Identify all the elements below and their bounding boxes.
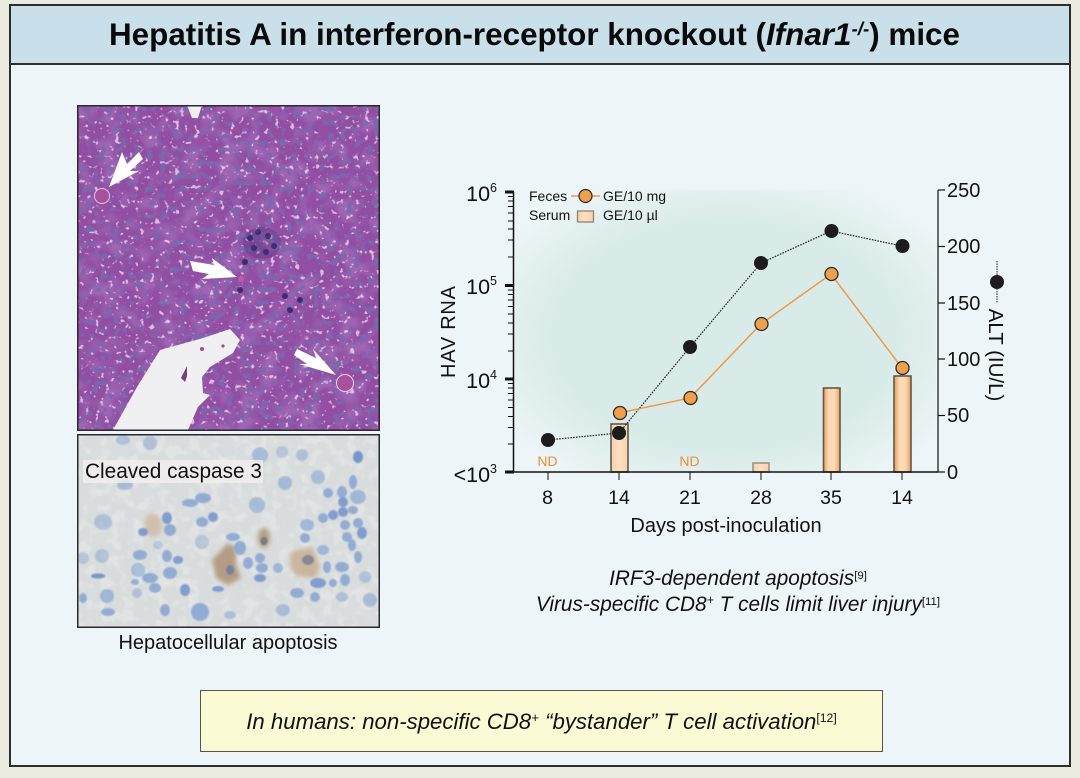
icon: white arrow, centre xyxy=(190,258,237,279)
right axis: ALT: ALT (IU/L) xyxy=(984,309,1007,401)
ALT line series xyxy=(541,224,910,447)
apoptotic cells xyxy=(94,188,354,392)
x axis: days xyxy=(505,472,938,537)
left axis: HAV RNA: 10 xyxy=(466,275,490,299)
x axis: days: 21 xyxy=(679,487,701,509)
left axis: HAV RNA: 4 xyxy=(490,368,497,382)
right axis: ALT: 0 xyxy=(947,462,958,484)
right axis: ALT: 200 xyxy=(947,236,980,258)
right axis: ALT: 250 xyxy=(947,180,980,202)
brown apoptotic cells xyxy=(144,513,320,585)
left axis: HAV RNA: 3 xyxy=(490,462,497,476)
text block: mechanisms: IRF3-dependent apoptosis[9] xyxy=(609,567,867,590)
icon: white arrow, lower right xyxy=(294,349,336,375)
legend xyxy=(529,188,666,223)
inflammatory cluster xyxy=(237,227,303,313)
image label: cleaved caspase 3: Cleaved caspase 3 xyxy=(85,460,262,483)
x axis: days: 35 xyxy=(820,487,842,509)
callout: human bystander activation: In humans: non-specific CD8+ “bystander” T cell activation[12] xyxy=(246,709,837,734)
legend marker: ALT xyxy=(990,261,1004,303)
right axis: ALT: 100 xyxy=(947,349,980,371)
serum bars xyxy=(611,376,911,472)
left axis: HAV RNA xyxy=(438,181,514,487)
left axis: HAV RNA: 6 xyxy=(490,181,497,195)
x axis: days: 8 xyxy=(542,487,553,509)
feces line series xyxy=(614,268,909,420)
title banner xyxy=(11,6,1069,65)
white vessel lumen xyxy=(113,329,240,430)
ND labels: ND xyxy=(679,453,700,469)
right axis: ALT: 150 xyxy=(947,293,980,315)
legend: GE/10 mg xyxy=(603,188,666,204)
left axis: HAV RNA: 10 xyxy=(466,182,490,206)
callout: human bystander activation xyxy=(200,690,883,752)
icon: white arrow, upper left xyxy=(109,152,143,187)
x axis: days: 14 xyxy=(608,487,630,509)
x axis: days: Days post-inoculation xyxy=(630,515,822,537)
blue nuclei xyxy=(77,435,377,621)
histology image: cleaved caspase 3 stain xyxy=(77,434,380,628)
right axis: ALT xyxy=(938,180,1007,484)
histology image: H&E liver section xyxy=(77,105,380,431)
ND labels xyxy=(537,453,700,469)
x axis: days: 28 xyxy=(750,487,772,509)
right axis: ALT: 50 xyxy=(947,405,969,427)
x axis: days: 14 xyxy=(891,487,913,509)
text block: mechanisms xyxy=(536,567,940,616)
legend: GE/10 µl xyxy=(603,207,658,223)
text block: mechanisms: Virus-specific CD8+ T cells limit liver injury[11] xyxy=(536,593,940,616)
title banner: Hepatitis A in interferon-receptor knockout (Ifnar1-/-) mice xyxy=(109,17,960,52)
left axis: HAV RNA: 5 xyxy=(490,274,497,288)
left axis: HAV RNA: <10 xyxy=(454,463,490,487)
left axis: HAV RNA: HAV RNA xyxy=(438,285,460,378)
ND labels: ND xyxy=(537,453,558,469)
legend: Feces xyxy=(529,188,567,204)
legend: Serum xyxy=(529,207,570,223)
caption: hepatocellular apoptosis: Hepatocellular apoptosis xyxy=(118,632,338,654)
chart: HAV RNA and ALT over days post-inoculation xyxy=(438,180,1007,537)
left axis: HAV RNA: 10 xyxy=(466,369,490,393)
